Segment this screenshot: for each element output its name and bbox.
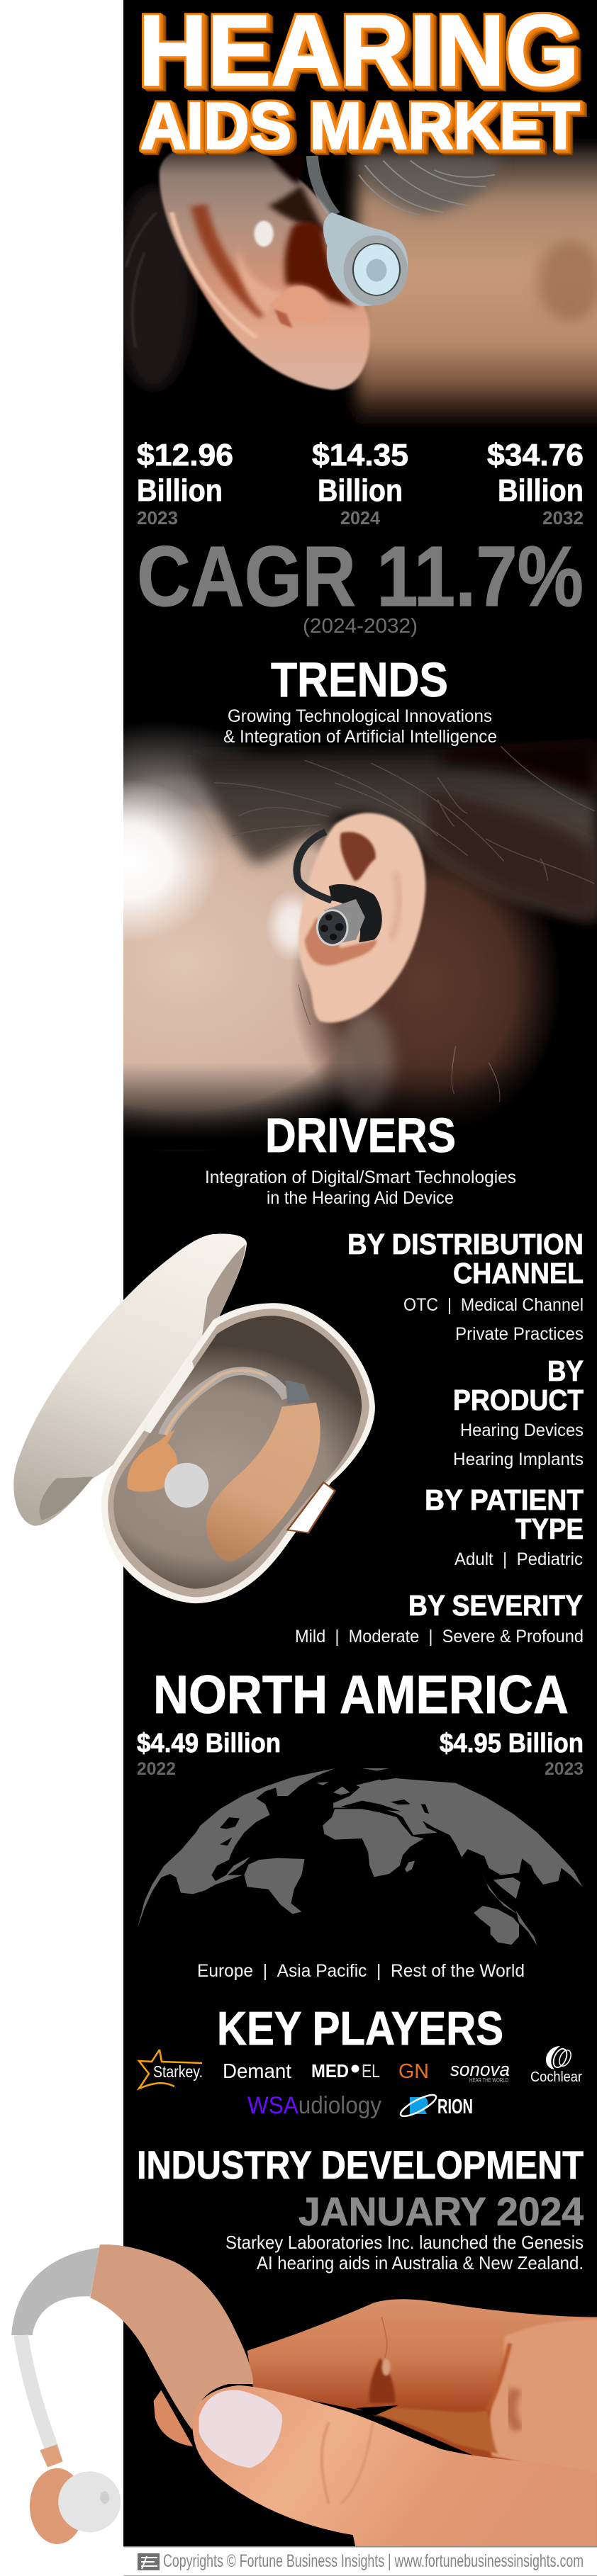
heading: industry development — [137, 2142, 584, 2273]
footer top rule — [123, 2546, 597, 2548]
title — [138, 0, 580, 163]
stat: 2032 market size — [487, 438, 584, 529]
heading: drivers: Integration of Digital/Smart Technologies — [205, 1168, 516, 1187]
stat: 2024 market size: $14.35 — [312, 438, 408, 473]
heading: by patient type: TYPE — [515, 1513, 584, 1545]
globe map — [138, 1768, 583, 1946]
image: hand holding hearing aid — [11, 2244, 597, 2549]
heading: by distribution channel: OTC | Medical Channel — [403, 1295, 584, 1315]
logo: Cochlear — [530, 2046, 582, 2085]
heading: trends: Growing Technological Innovations — [228, 706, 492, 726]
heading: drivers — [205, 1108, 516, 1208]
stat: north america 2022: 2022 — [137, 1759, 176, 1779]
logo: RION — [398, 2091, 473, 2120]
stat: 2023 market size: 2023 — [137, 507, 178, 529]
heading: by patient type: Adult | Pediatric — [454, 1549, 583, 1569]
logo: MED-EL — [311, 2060, 380, 2081]
heading: by distribution channel: BY DISTRIBUTION — [347, 1228, 584, 1260]
heading: by product: Hearing Devices — [460, 1420, 584, 1440]
heading: north america: NORTH AMERICA — [153, 1665, 569, 1725]
logo: GN: GN — [398, 2060, 429, 2083]
heading: by product: PRODUCT — [453, 1384, 584, 1416]
logo: WS Audiology: WSAudiology — [247, 2092, 381, 2119]
heading: by severity: BY SEVERITY — [408, 1589, 583, 1622]
stat: north america 2022: $4.49 Billion — [137, 1729, 281, 1758]
heading: by patient type — [425, 1484, 584, 1569]
heading: drivers: DRIVERS — [265, 1108, 456, 1163]
heading: by distribution channel — [347, 1228, 584, 1344]
logo: RION: RION — [437, 2096, 473, 2118]
heading: trends: & Integration of Artificial Intelligence — [223, 727, 497, 747]
heading: by product: Hearing Implants — [453, 1450, 584, 1469]
heading: by patient type: BY PATIENT — [425, 1484, 584, 1516]
stat: 2032 market size: 2032 — [542, 507, 584, 529]
logo: Sonova: HEAR THE WORLD — [469, 2077, 508, 2084]
heading: trends — [223, 653, 497, 747]
footer band — [123, 2546, 597, 2576]
stat: 2023 market size — [137, 438, 233, 529]
image: hearing aid in open case — [13, 1233, 375, 1603]
title: AIDS MARKET — [140, 89, 580, 163]
stat: north america 2023: $4.95 Billion — [440, 1729, 584, 1758]
heading: by distribution channel: Private Practices — [455, 1324, 584, 1344]
panel: black background — [123, 0, 597, 2546]
stat: north america 2022 — [137, 1729, 281, 1779]
logo: Cochlear: Cochlear — [530, 2069, 582, 2085]
logo: MED-EL: EL — [362, 2060, 380, 2081]
stat: 2024 market size: Billion — [318, 473, 403, 508]
heading: drivers: in the Hearing Aid Device — [267, 1188, 454, 1208]
logo: Starkey: Starkey. — [153, 2062, 203, 2081]
heading: by distribution channel: CHANNEL — [453, 1257, 584, 1289]
logo: Sonova: sonova — [450, 2059, 510, 2080]
logo: Demant: Demant — [223, 2060, 291, 2083]
logo: MED-EL: MED — [311, 2060, 349, 2081]
stat: 2032 market size: Billion — [498, 473, 584, 508]
stat: north america 2023: 2023 — [545, 1759, 584, 1779]
CAGR callout: (2024-2032) — [303, 615, 418, 638]
stat: 2024 market size: 2024 — [340, 507, 381, 529]
stat: 2032 market size: $34.76 — [487, 438, 584, 473]
heading: by product — [453, 1355, 584, 1469]
heading: by severity — [295, 1589, 584, 1646]
stat: north america 2023 — [440, 1729, 584, 1779]
heading: industry development: JANUARY 2024 — [298, 2189, 584, 2235]
stat: 2024 market size — [312, 438, 408, 529]
heading: by product: BY — [547, 1355, 584, 1387]
heading: by severity: Mild | Moderate | Severe & Profound — [295, 1627, 584, 1646]
regions list: Europe | Asia Pacific | Rest of the World — [197, 1961, 525, 1981]
stat: 2023 market size: Billion — [137, 473, 223, 508]
stat: 2023 market size: $12.96 — [137, 438, 233, 473]
heading: key players: KEY PLAYERS — [217, 2002, 503, 2055]
image: ear with hearing aid — [114, 144, 597, 429]
heading: trends: TRENDS — [271, 653, 448, 707]
image: woman's ear with black earpiece — [123, 725, 597, 1151]
logo: Starkey — [139, 2050, 203, 2089]
footer logo — [138, 2553, 160, 2570]
footer bottom rule — [123, 2575, 597, 2576]
